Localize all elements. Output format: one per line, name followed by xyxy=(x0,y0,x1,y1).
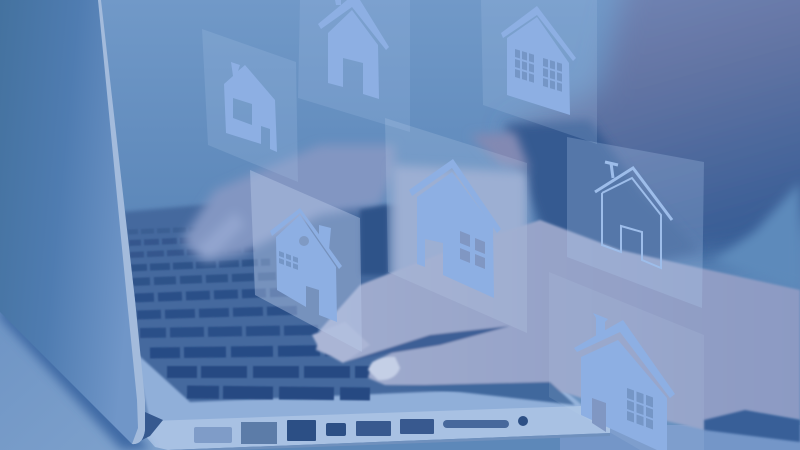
panel: left card with window house xyxy=(202,29,298,182)
panel: top right card xyxy=(481,0,597,144)
icon: large house xyxy=(409,159,501,298)
panel: centre card xyxy=(385,118,527,333)
hand seen behind centre card xyxy=(392,165,527,300)
table surface xyxy=(0,300,800,450)
right hand and arm xyxy=(312,220,800,430)
keyboard key rows xyxy=(128,228,400,394)
panel: right card xyxy=(567,137,704,308)
ports xyxy=(194,416,528,444)
panel: lower left card xyxy=(250,170,362,352)
icon: house with door xyxy=(318,0,389,99)
icon: house with chimney xyxy=(574,313,675,450)
dark shadow under the wrist xyxy=(704,410,800,442)
laptop screen lid xyxy=(0,0,163,450)
icon: house with square window xyxy=(224,62,277,152)
icon: house with round window xyxy=(270,208,342,322)
sleeve and upper-right backdrop xyxy=(505,0,800,288)
keyboard deck xyxy=(122,205,560,425)
front edge xyxy=(147,405,610,450)
left hand, blurred xyxy=(182,132,530,262)
icon: outlined house xyxy=(595,162,672,268)
laptop base with keyboard xyxy=(122,205,610,450)
dark shadow between the hands xyxy=(360,205,388,275)
icon: house with two grid windows xyxy=(501,6,576,115)
panel: top centre card xyxy=(298,0,410,132)
panel: bottom right card xyxy=(549,272,704,450)
